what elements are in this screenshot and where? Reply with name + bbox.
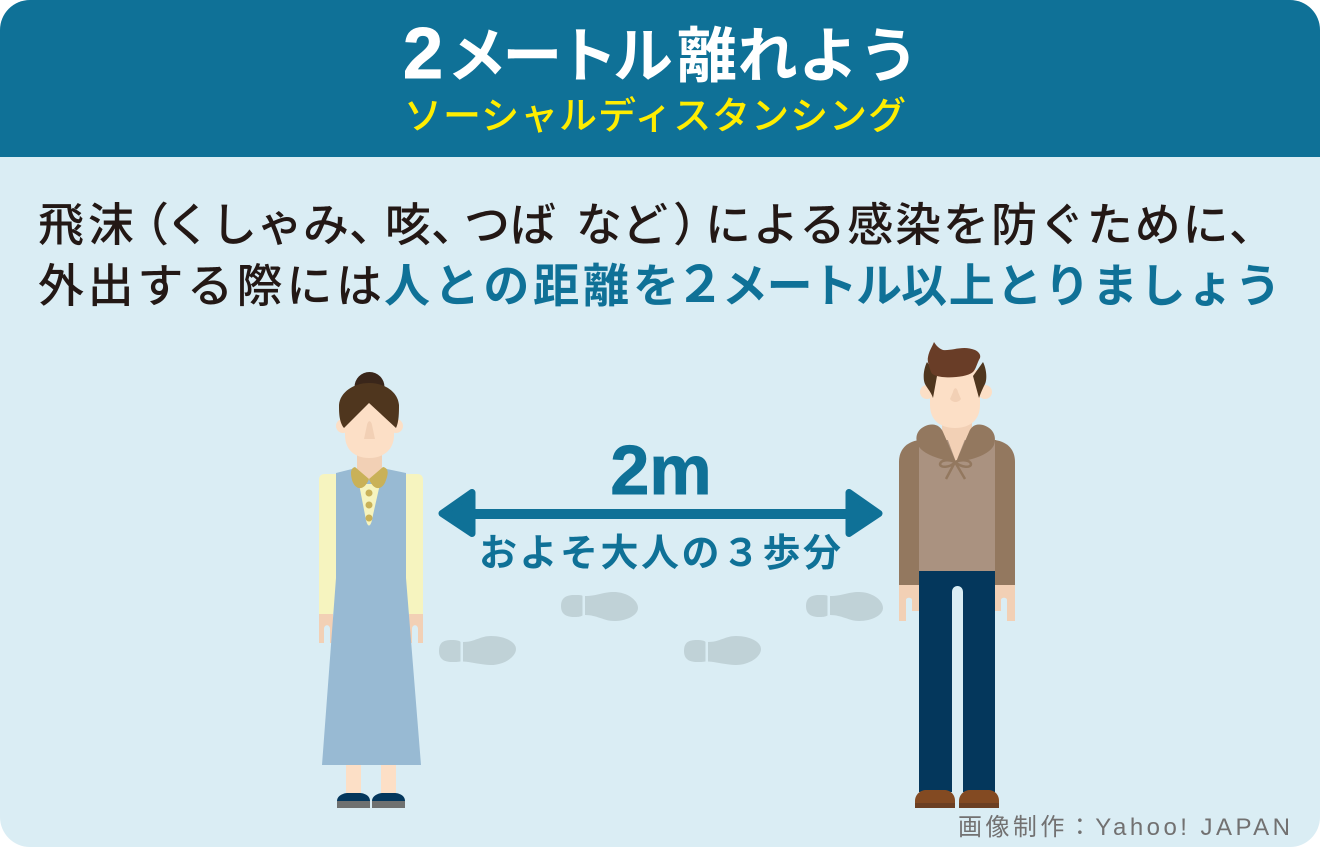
hair bun (354, 372, 384, 402)
icon: footprint 2 (561, 592, 638, 621)
hands (899, 585, 1015, 621)
shoes (337, 793, 405, 808)
trousers (919, 570, 995, 792)
sweater body (918, 440, 996, 571)
sleeves (899, 440, 1015, 585)
title: 離れよう (677, 23, 919, 90)
text block: line 1: つば (464, 199, 556, 251)
dress (322, 468, 421, 765)
hair (339, 383, 399, 428)
text block: line 1: 飛沫 (38, 199, 134, 251)
hair top (928, 342, 980, 377)
ear left (336, 419, 350, 433)
text block: line 1: など (576, 199, 668, 251)
distance label: 2m (610, 431, 712, 509)
figure: woman (319, 372, 423, 808)
hood string (940, 460, 971, 479)
sleeves (319, 474, 423, 614)
legs (346, 760, 396, 796)
buttons (366, 490, 372, 522)
text block: line 1: 咳、 (385, 199, 477, 251)
text block: line 1: （ (123, 199, 169, 251)
face (930, 370, 980, 428)
title: 2 (403, 14, 443, 94)
shoes (915, 790, 999, 808)
text block: line 2: 人との距離を (384, 260, 679, 312)
neck (357, 450, 382, 480)
text block: line 2: 以上とりましょう (901, 260, 1281, 312)
distance caption: およそ大人の３歩分 (479, 533, 841, 575)
text block: line 1: による感染を防ぐために、 (705, 199, 1275, 251)
subtitle: ソーシャルディスタンシング (404, 96, 906, 138)
text block: line 1: くしゃみ、 (165, 199, 395, 251)
icon: footprint 3 (684, 636, 761, 665)
ear left (920, 385, 934, 399)
neck front (942, 424, 971, 462)
text block: line 2: 外出する際には (38, 260, 382, 312)
text block: line 2 (38, 257, 1281, 313)
blouse (359, 484, 380, 526)
face (345, 400, 394, 458)
neck (942, 420, 972, 460)
text block: line 2: メートル (722, 260, 902, 312)
arrow: two-way (442, 492, 879, 534)
text block: line 2: ２ (675, 257, 725, 313)
collar (351, 467, 388, 488)
ear right (389, 419, 403, 433)
side hair (924, 362, 986, 398)
title: メートル (447, 23, 673, 90)
credit: 画像制作：Yahoo! JAPAN (958, 814, 1290, 841)
nose (364, 421, 375, 439)
icon: footprint 4 (806, 592, 883, 621)
title (403, 14, 919, 94)
text block: line 1: ） (673, 199, 719, 251)
nose (950, 388, 961, 402)
panel: header (0, 0, 1320, 157)
hands (319, 610, 423, 643)
icon: footprint 1 (439, 636, 516, 665)
ear right (978, 385, 992, 399)
text block: line 1 (38, 199, 1275, 251)
figure: man (899, 342, 1015, 808)
hood (916, 424, 995, 462)
